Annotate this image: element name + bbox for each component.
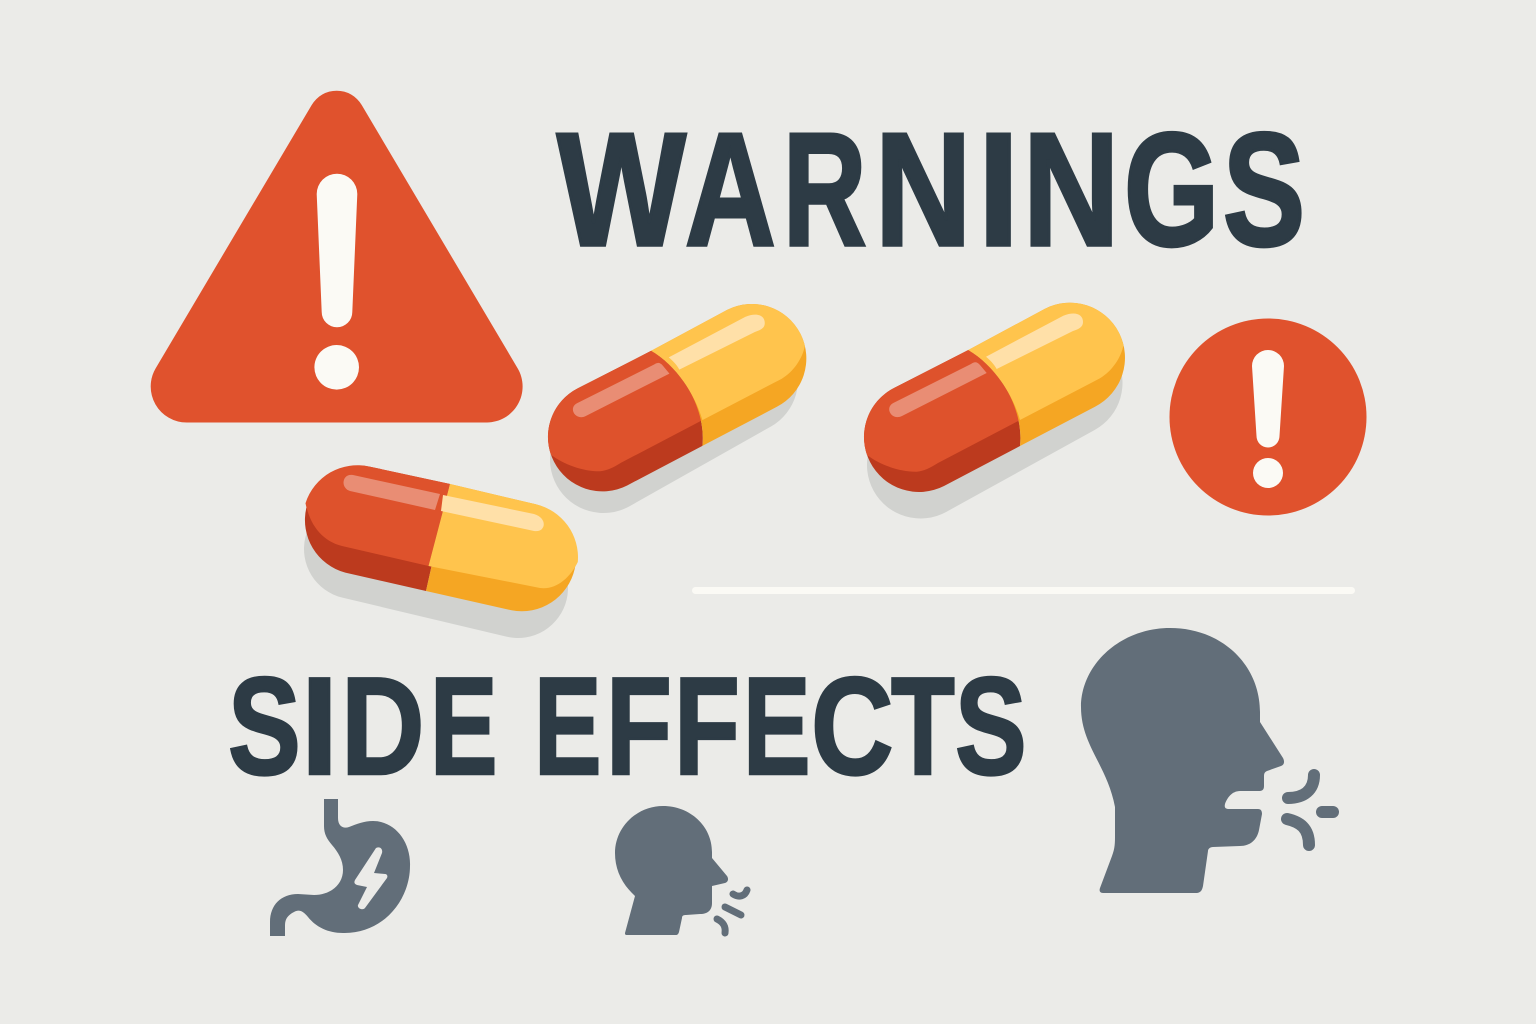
divider line	[692, 587, 1355, 594]
heading: warnings: N	[1023, 100, 1119, 280]
icon: small head coughing	[615, 806, 747, 935]
heading: side effects: E	[430, 649, 497, 804]
icon: large head coughing	[1081, 628, 1333, 893]
heading: warnings: S	[1223, 100, 1305, 280]
icon: stomach pain	[270, 799, 410, 936]
heading: side effects: E	[743, 649, 811, 804]
icon: warning circle	[1170, 318, 1366, 516]
heading: side effects: C	[811, 649, 893, 804]
heading: side effects: E	[534, 649, 601, 804]
heading: warnings	[555, 100, 1305, 280]
icon: warning triangle	[151, 91, 523, 422]
icon: capsule lower left	[305, 465, 578, 611]
heading: side effects: S	[955, 649, 1027, 804]
heading: side effects: S	[228, 649, 301, 804]
heading: warnings: N	[875, 100, 971, 280]
heading: side effects: T	[891, 649, 955, 804]
heading: side effects: D	[341, 649, 425, 804]
icon: capsule upper middle	[548, 304, 806, 491]
heading: warnings: R	[783, 100, 866, 280]
heading: warnings: G	[1124, 100, 1219, 280]
heading: side effects: F	[606, 649, 672, 804]
heading: side effects: I	[301, 649, 338, 804]
icon: capsule upper right	[864, 303, 1125, 492]
heading: warnings: I	[978, 100, 1019, 280]
heading: warnings: A	[685, 100, 776, 280]
heading: warnings: W	[557, 100, 685, 280]
heading: side effects: F	[674, 649, 740, 804]
heading: side effects	[228, 649, 1027, 804]
